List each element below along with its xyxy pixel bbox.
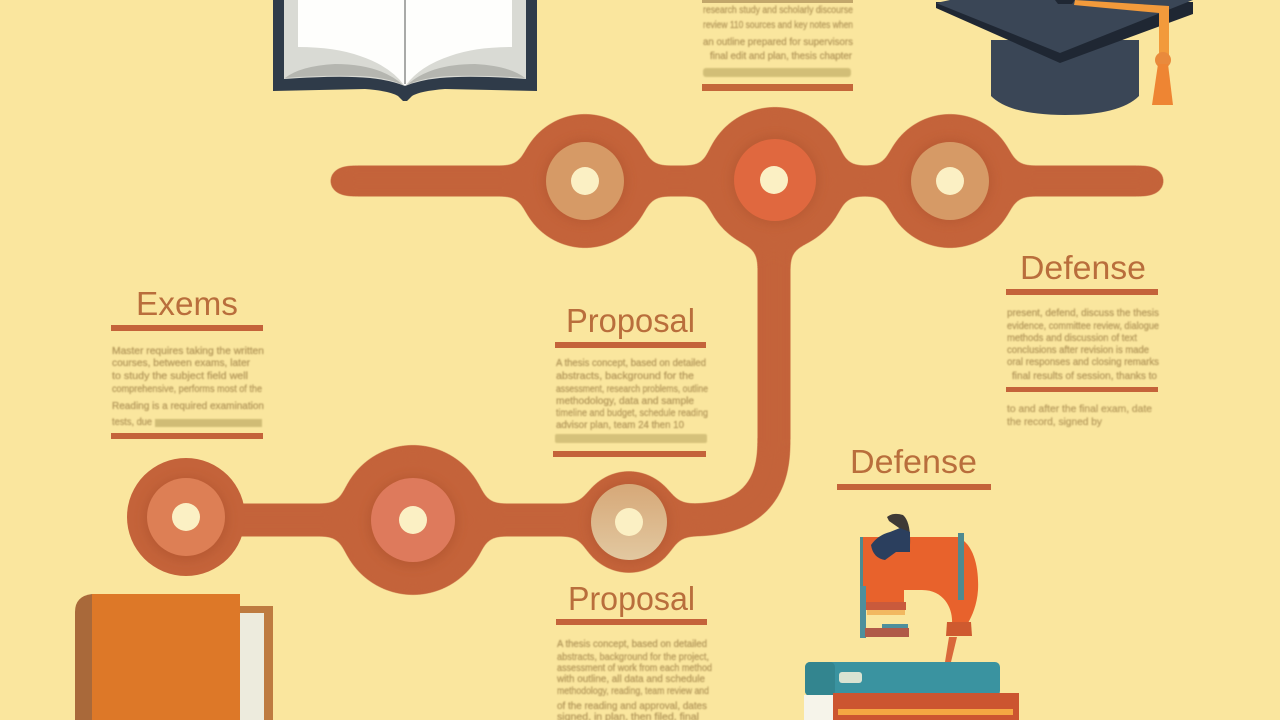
icon: closed book: [75, 594, 273, 720]
text block: top centre: [702, 0, 853, 91]
text block: top centre: review 110 sources and key notes when: [703, 20, 853, 31]
text block: top centre: research study and scholarly discourse: [703, 5, 853, 16]
heading: proposal upper: Proposal: [566, 302, 695, 339]
text block: exems: [111, 285, 264, 439]
node: upper left: [543, 139, 627, 223]
icon: graduation cap: [936, 0, 1193, 115]
text block: proposal lower: A thesis concept, based on detailed: [557, 639, 707, 650]
text block: proposal upper: methodology, data and sample: [556, 396, 694, 407]
text block: defense lower heading: Defense: [850, 443, 977, 480]
text block: exems: comprehensive, performs most of the: [112, 384, 262, 395]
text block: exems: Master requires taking the written: [112, 346, 264, 357]
text block: proposal upper: assessment, research problems, outline: [556, 384, 708, 395]
text block: exems: Reading is a required examination: [112, 401, 264, 412]
heading: exems: Exems: [136, 285, 238, 322]
text block: proposal lower: with outline, all data and schedule: [556, 674, 705, 685]
text block: defense right: present, defend, discuss the thesis: [1007, 308, 1159, 319]
icon: open book: [273, 0, 537, 101]
text block: exems: courses, between exams, later: [112, 358, 251, 369]
node: lower middle: [368, 477, 458, 567]
text block: proposal lower: assessment of work from each method: [557, 663, 712, 674]
text block: defense right: to and after the final exam, date: [1007, 404, 1152, 415]
text block: proposal lower: methodology, reading, team review and: [557, 686, 709, 697]
text block: proposal upper: A thesis concept, based on detailed: [556, 358, 706, 369]
text block: top centre: an outline prepared for supervisors: [703, 37, 853, 48]
text block: defense right: conclusions after revision is made: [1007, 345, 1149, 356]
text block: proposal upper: abstracts, background for the: [556, 371, 694, 382]
text block: proposal lower: abstracts, background for the project,: [557, 652, 709, 663]
text block: proposal lower: of the reading and approval, dates: [557, 701, 707, 712]
text block: defense lower heading: [837, 443, 991, 490]
text block: defense right: [1006, 249, 1159, 428]
text block: defense right: oral responses and closing remarks: [1007, 357, 1159, 368]
node: exams: [127, 458, 245, 576]
text block: proposal upper: [553, 302, 708, 457]
text block: defense right: methods and discussion of text: [1007, 333, 1137, 344]
text block: proposal upper: timeline and budget, schedule reading: [556, 408, 708, 419]
heading: defense: Defense: [1020, 249, 1146, 286]
text block: exems: to study the subject field well: [112, 371, 248, 382]
node: lower proposal: [588, 481, 670, 563]
text block: defense right: the record, signed by: [1007, 417, 1102, 428]
text block: exems: tests, due: [112, 417, 152, 428]
text block: defense right: evidence, committee review, dialogue: [1007, 321, 1159, 332]
text block: defense right: final results of session, thanks to: [1012, 371, 1157, 382]
node: upper centre: [731, 136, 819, 224]
text block: top centre: final edit and plan, thesis chapter: [710, 51, 853, 62]
node: upper right: [908, 139, 992, 223]
timeline connector path: [200, 107, 1166, 595]
icon: microscope on books: [804, 514, 1019, 720]
text block: proposal lower: [556, 580, 712, 720]
text block: proposal upper: advisor plan, team 24 then 10: [556, 420, 684, 431]
heading: proposal lower: Proposal: [568, 580, 695, 617]
